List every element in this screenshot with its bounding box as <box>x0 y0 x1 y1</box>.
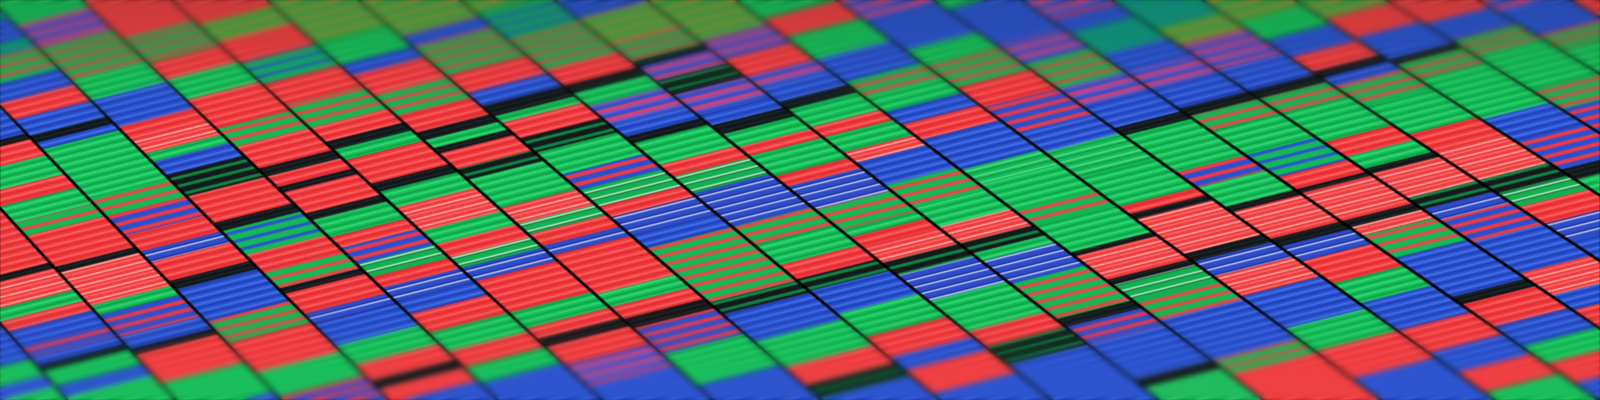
lane 6 <box>358 0 940 400</box>
lane 9 <box>646 0 1264 400</box>
lane 12 <box>932 0 1599 400</box>
lane 16 <box>1294 0 1600 194</box>
lane -1 <box>0 210 176 400</box>
lane 10 <box>736 0 1382 400</box>
lane 2 <box>0 0 498 400</box>
lane 19 <box>1570 0 1600 20</box>
lane 18 <box>1478 0 1600 75</box>
lane -2 <box>0 324 68 400</box>
lane 4 <box>170 0 714 400</box>
lane 13 <box>1021 0 1600 400</box>
lane 14 <box>1112 0 1600 328</box>
lane 3 <box>81 0 603 400</box>
bottom depth-of-field blur <box>0 300 1600 400</box>
lane 7 <box>460 0 1052 400</box>
lane 11 <box>836 0 1496 400</box>
lane 1 <box>0 8 390 400</box>
lane 17 <box>1386 0 1600 132</box>
lane 8 <box>554 0 1160 400</box>
lane 15 <box>1202 0 1600 260</box>
lane 5 <box>266 0 822 400</box>
top depth-of-field blur <box>0 0 1600 130</box>
lane 0 <box>0 106 282 400</box>
